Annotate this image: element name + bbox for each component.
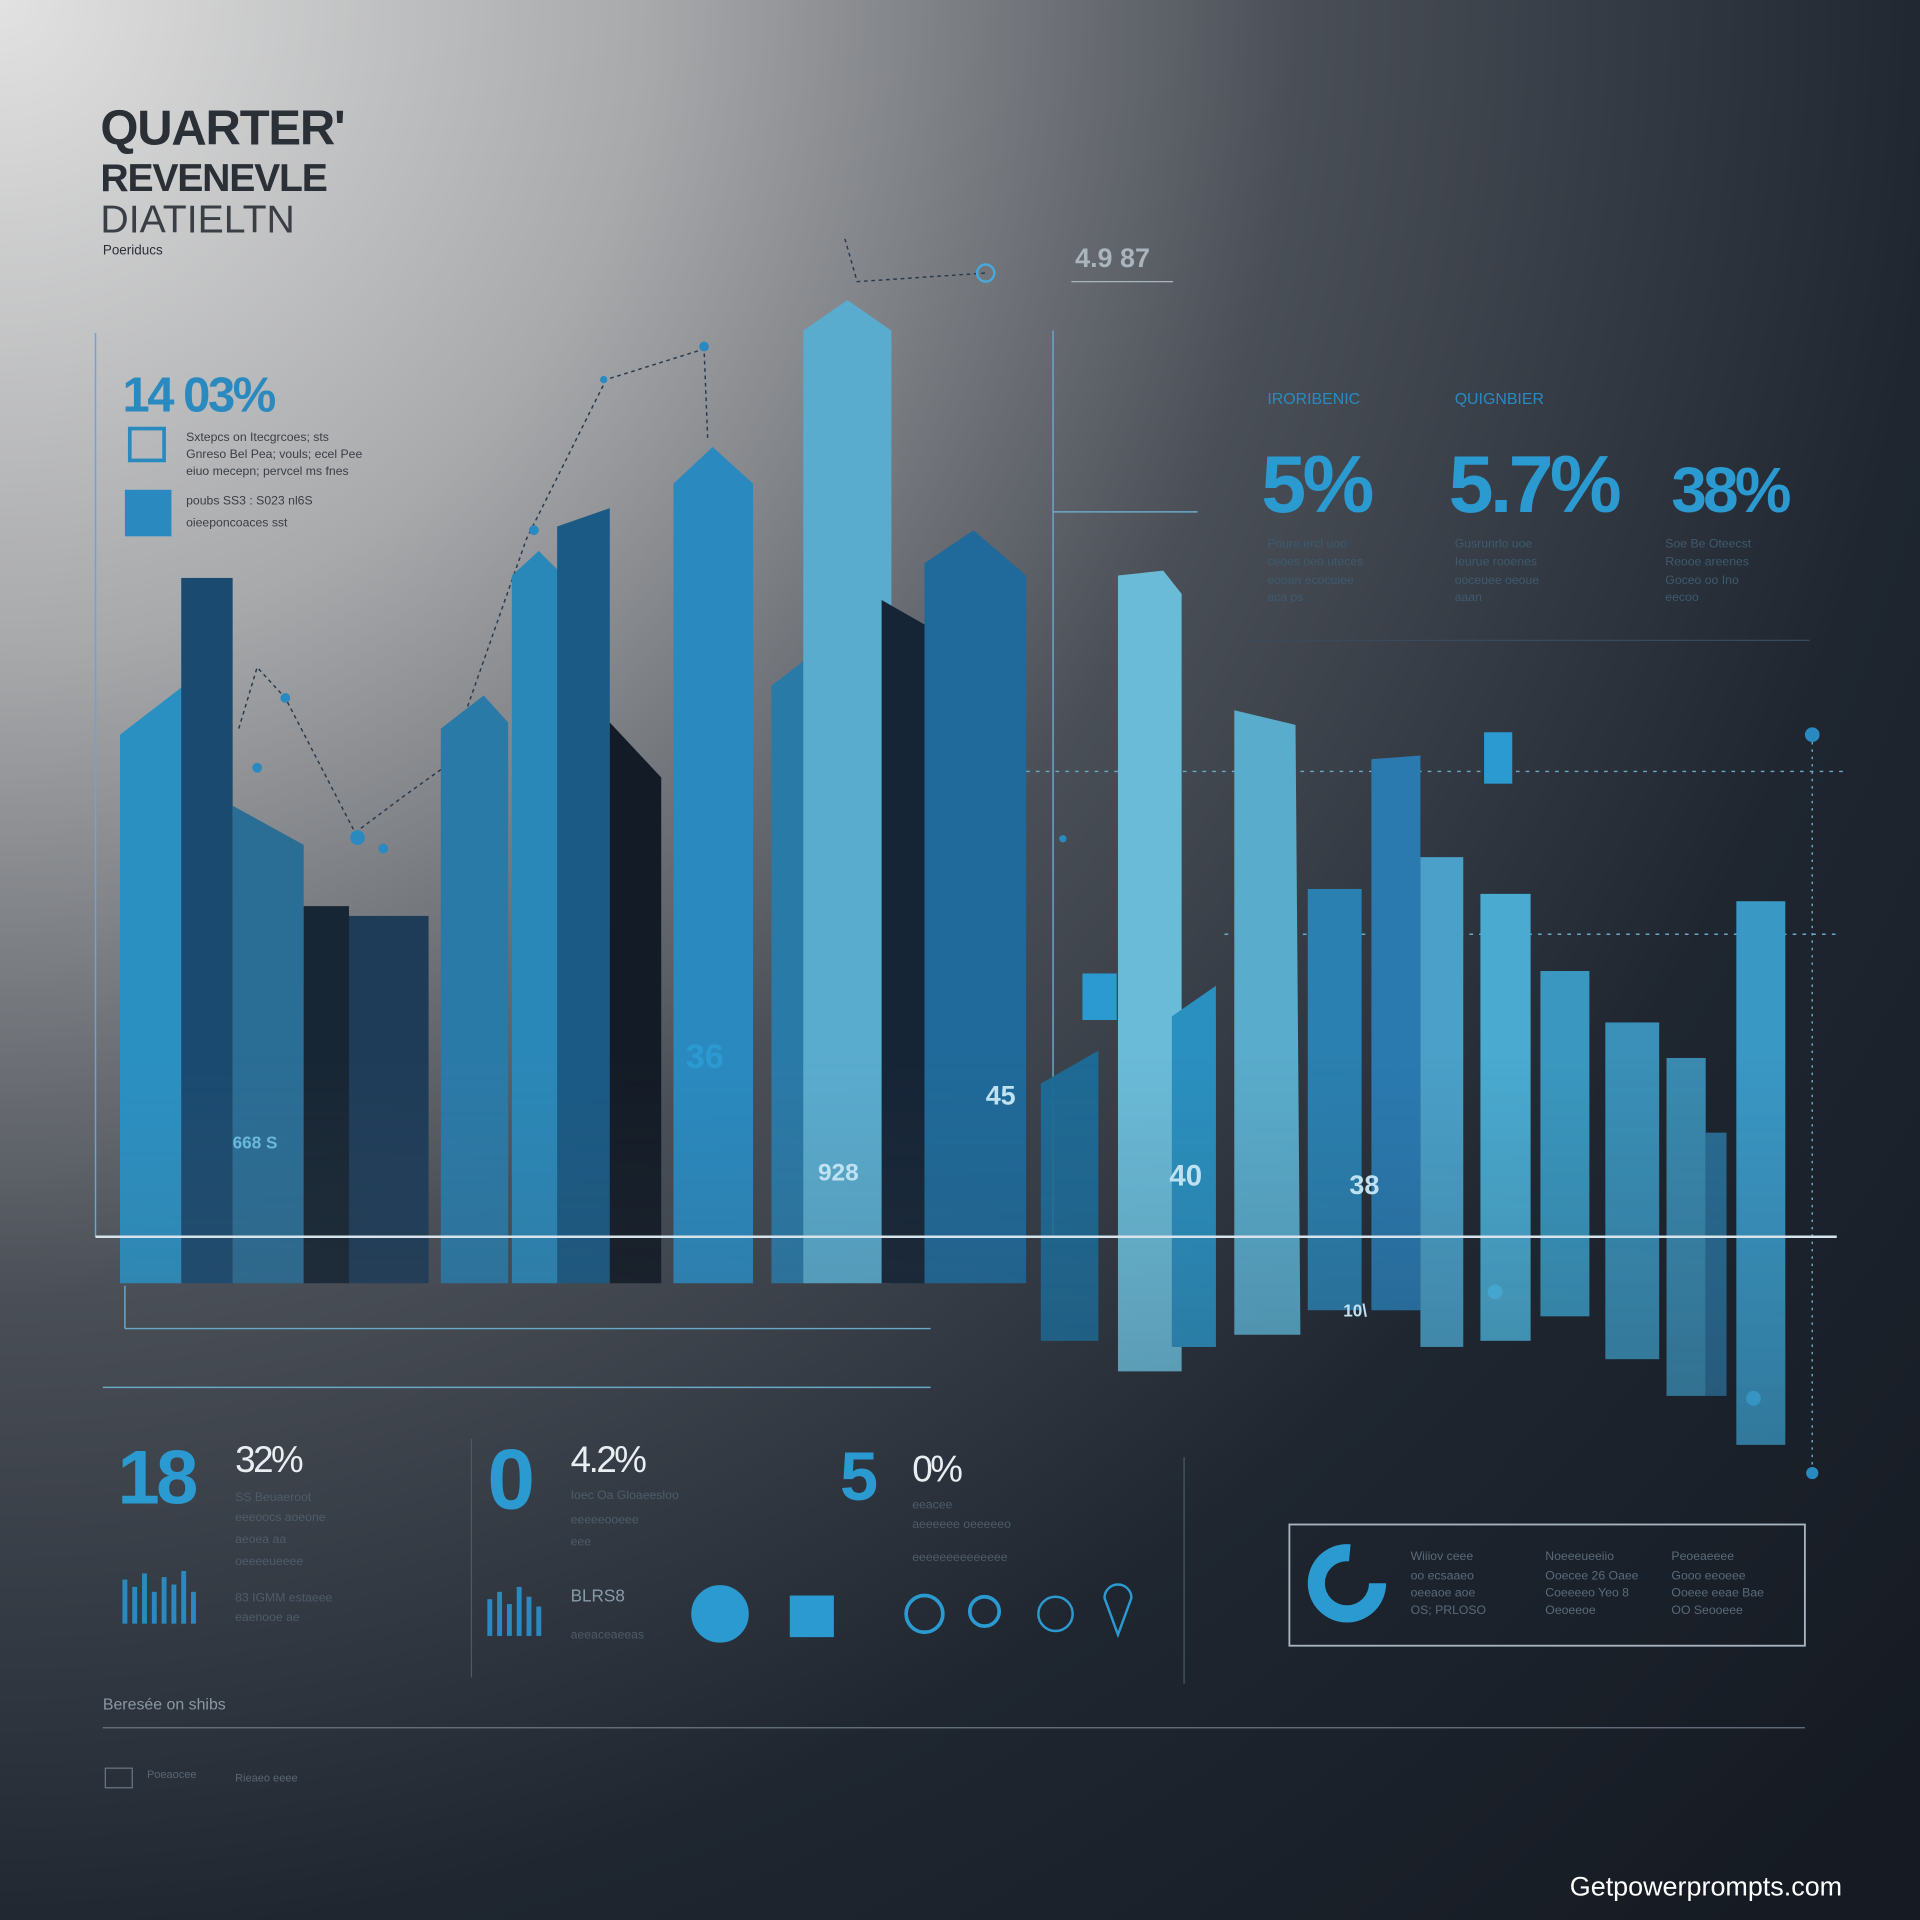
stats: top right: ooceuee oeoue <box>1455 573 1539 587</box>
stats: bottom: eaenooe ae <box>235 1610 300 1624</box>
stats: top right: Ieurue rooenes <box>1455 555 1537 569</box>
callout box with donut: OO Seooeee <box>1671 1603 1743 1617</box>
icons row <box>693 1584 1131 1641</box>
footer: Beresée on shibs <box>103 1696 226 1713</box>
stats: bottom: SS Beuaeroot <box>235 1490 312 1504</box>
stats: bottom: eeeeeeeeeeeeee <box>912 1550 1008 1564</box>
callout box with donut: oo ecsaaeo <box>1411 1569 1474 1583</box>
stat: top left: poubs SS3 : S023 nl6S <box>186 493 313 507</box>
callout box with donut <box>1289 1524 1805 1646</box>
stats: bottom: eee <box>571 1534 591 1548</box>
bar labels: 928 <box>818 1159 859 1186</box>
bar labels: 38 <box>1349 1170 1379 1200</box>
stats: bottom: eeeeeooeee <box>571 1512 639 1526</box>
stats: top right: Gusrunrlo uoe <box>1455 536 1532 550</box>
stats: bottom <box>118 1432 1184 1684</box>
stats: top right: Goceo oo Ino <box>1665 573 1739 587</box>
stats: bottom: aeoea aa <box>235 1532 286 1546</box>
callout box with donut: Ooecee 26 Oaee <box>1545 1569 1639 1583</box>
stats: top right: Poure ercl uoo <box>1267 536 1347 550</box>
trend line <box>239 239 986 833</box>
callout box with donut: Oeoeeoe <box>1545 1603 1596 1617</box>
stats: bottom: 18 <box>118 1436 196 1521</box>
watermark: Getpowerprompts.com <box>1570 1872 1842 1902</box>
stats: bottom: 0% <box>912 1449 962 1490</box>
stat: top left: oieeponcoaces sst <box>186 516 288 530</box>
bar chart <box>120 300 1785 1445</box>
stats: bottom: aeeaceaeeas <box>571 1627 644 1641</box>
stats: top right: IRORIBENIC <box>1267 391 1360 408</box>
stat: top left: eiuo mecepn; pervcel ms fnes <box>186 464 349 478</box>
stats: bottom: Ioec Oa Gloaeesloo <box>571 1488 679 1502</box>
stats: bottom: 5 <box>840 1438 878 1515</box>
stats: bottom: BLRS8 <box>571 1586 625 1606</box>
callout box with donut: OS; PRLOSO <box>1411 1603 1486 1617</box>
footer <box>103 1696 1805 1788</box>
title: REVENEVLE <box>100 157 327 200</box>
stats: bottom: oeeeeueeee <box>235 1554 303 1568</box>
title: DIATIELTN <box>100 199 295 242</box>
callout box with donut: Noeeeueeiio <box>1545 1549 1614 1563</box>
stat: top value <box>1071 243 1173 282</box>
stats: bottom: 32% <box>235 1439 303 1480</box>
bar labels: 10\ <box>1343 1300 1367 1320</box>
stat: top left: Gnreso Bel Pea; vouls; ecel Pee <box>186 447 362 461</box>
bar labels <box>233 1038 1379 1320</box>
stats: bottom: 0 <box>487 1432 535 1528</box>
stat: top value: 4.9 87 <box>1075 243 1150 273</box>
title: QUARTER' <box>100 101 344 155</box>
stats: top right: eooan ecocuiee <box>1267 573 1354 587</box>
stats: top right: ceoes oeo uteces <box>1267 555 1363 569</box>
stats: bottom: eeeoocs aoeone <box>235 1510 326 1524</box>
stats: top right: Soe Be Oteecst <box>1665 536 1752 550</box>
stats: bottom: aeeeeee oeeeeeo <box>912 1517 1011 1531</box>
stats: top right: aca ps <box>1267 590 1303 604</box>
callout box with donut: Peoeaeeee <box>1671 1549 1734 1563</box>
title <box>100 101 344 258</box>
stats: bottom: 4.2% <box>571 1439 646 1480</box>
callout box with donut: Coeeeeo Yeo 8 <box>1545 1586 1629 1600</box>
bar labels: 45 <box>986 1080 1016 1110</box>
callout box with donut: Ooeee eeae Bae <box>1671 1586 1764 1600</box>
callout box with donut: oeeaoe aoe <box>1411 1586 1475 1600</box>
stat: top left: Sxtepcs on Itecgrcoes; sts <box>186 430 329 444</box>
stats: top right <box>1249 391 1810 640</box>
stat: top left: 14 03% <box>122 368 276 422</box>
stats: top right: 5% <box>1261 440 1372 530</box>
stats: bottom: 83 IGMM estaeee <box>235 1591 333 1605</box>
footer: Poeaocee <box>147 1769 197 1781</box>
stats: top right: eecoo <box>1665 590 1699 604</box>
callout box with donut: Wiiiov ceee <box>1411 1549 1473 1563</box>
stats: top right: QUIGNBIER <box>1455 391 1544 408</box>
footer: Rieaeo eeee <box>235 1773 298 1785</box>
stats: top right: Reooe areenes <box>1665 555 1749 569</box>
axis lines <box>96 331 1849 1469</box>
callout box with donut: Gooo eeoeee <box>1671 1569 1746 1583</box>
stats: top right: 38% <box>1671 455 1790 526</box>
baseline <box>96 1236 1837 1238</box>
bar labels: 36 <box>686 1038 724 1076</box>
stats: top right: 5.7% <box>1449 440 1620 530</box>
stats: top right: aaan <box>1455 590 1482 604</box>
stat: top left <box>122 368 362 536</box>
stats: bottom: eeacee <box>912 1498 953 1512</box>
bar labels: 40 <box>1169 1159 1202 1192</box>
title: Poeriducs <box>103 243 163 258</box>
bar labels: 668 S <box>233 1133 277 1153</box>
